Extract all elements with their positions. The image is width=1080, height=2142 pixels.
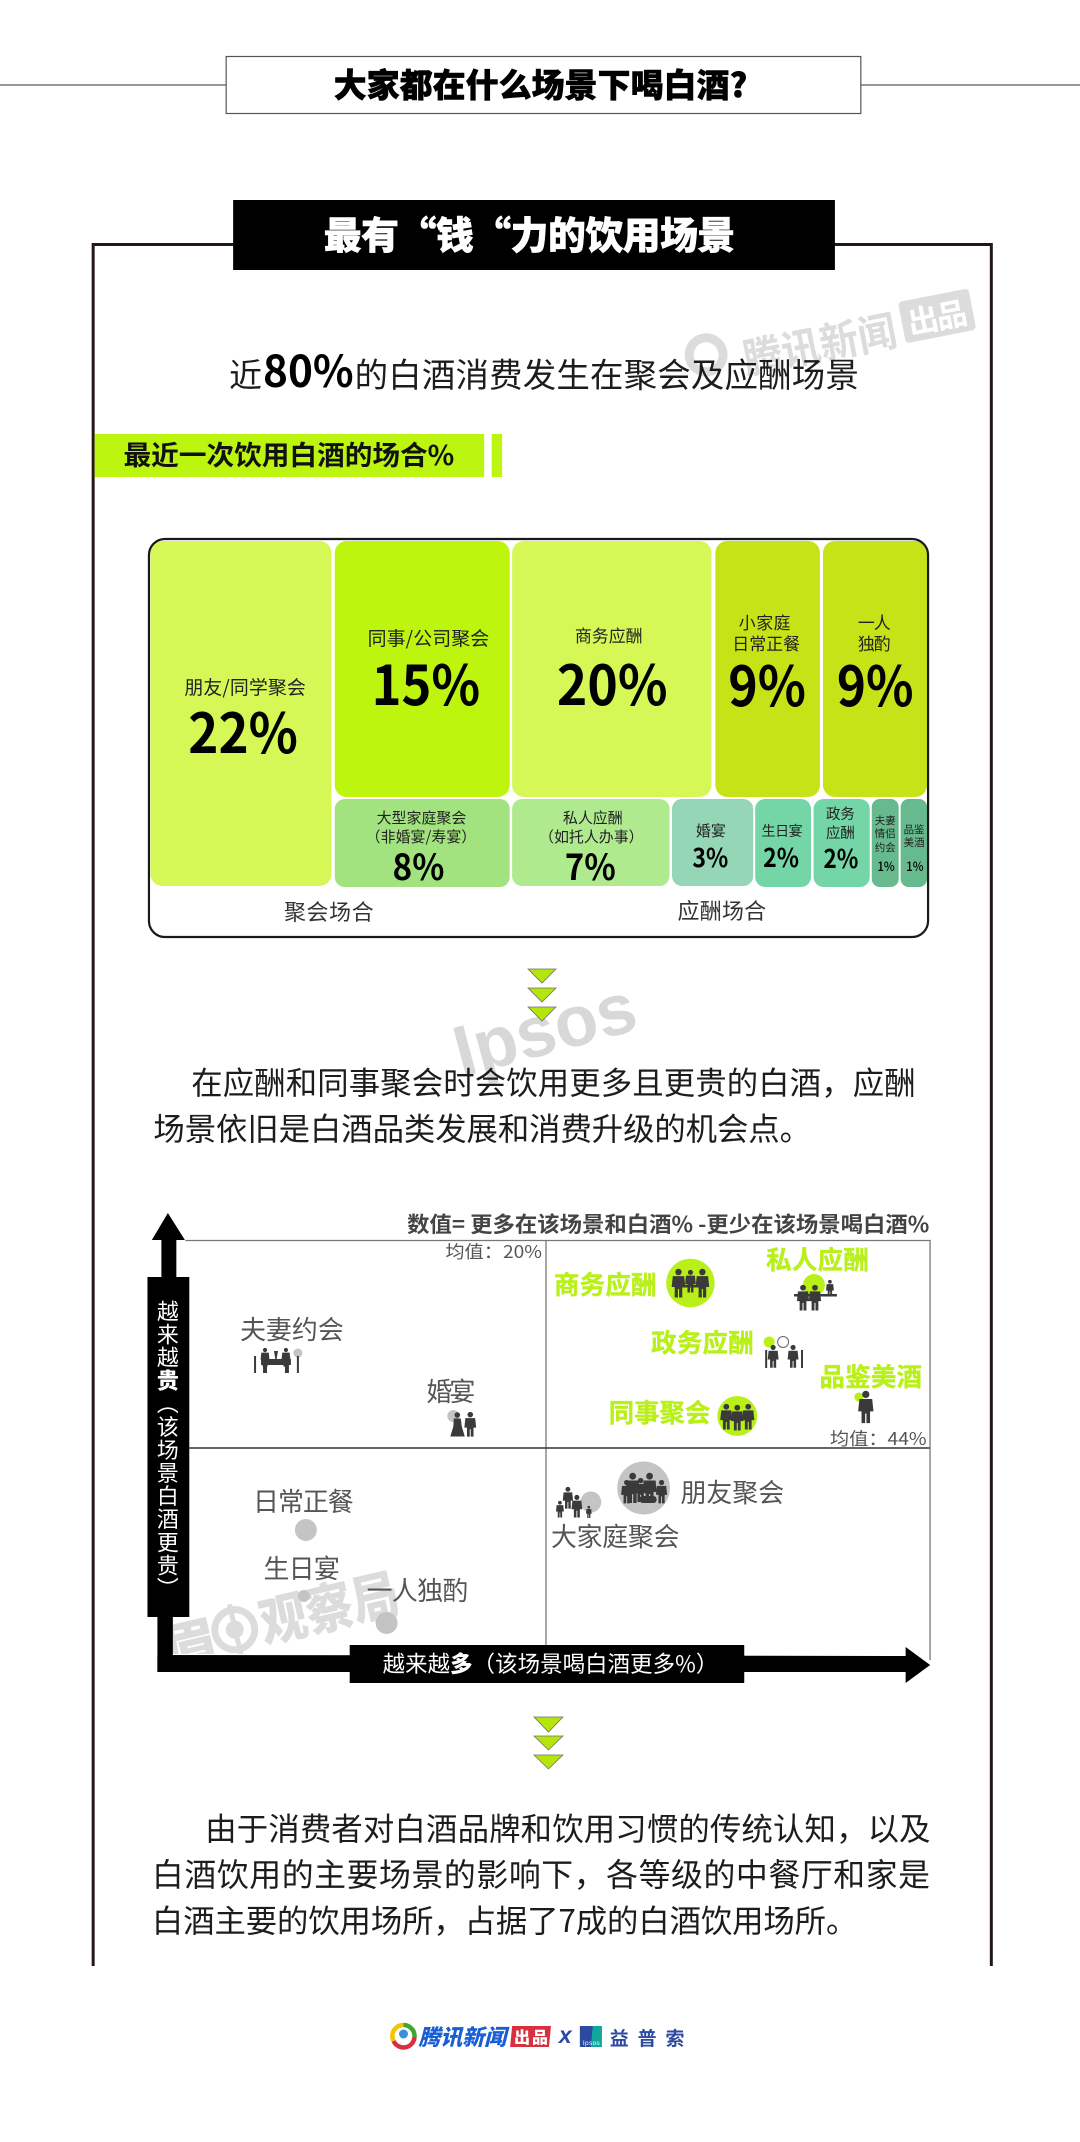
cell: business	[512, 541, 711, 797]
cell: government	[814, 799, 870, 887]
paragraph: drinking venues: 白酒主要的饮用场所，占据了7成的白酒饮用场所。	[152, 1897, 857, 1942]
watermark: Tencent News: 腾讯新闻	[737, 297, 902, 387]
bubble: government	[651, 1323, 803, 1368]
cell: tasting: 1%	[906, 856, 924, 875]
treemap chart	[149, 539, 928, 937]
watermark: observation bureau	[172, 1570, 398, 1654]
bubble: business	[554, 1259, 715, 1307]
quadrant chart: 均值：44%	[830, 1426, 927, 1451]
content frame	[93, 244, 991, 1966]
cell: government: 2%	[824, 839, 858, 876]
cell: private: 7%	[565, 839, 616, 891]
cell: friends: 朋友/同学聚会	[184, 673, 306, 700]
logo: Tencent News: 腾讯新闻	[418, 2021, 510, 2052]
bubble: drinking alone: 一人独酌	[367, 1571, 468, 1608]
cell: private: （如托人办事）	[539, 826, 644, 847]
cell: tasting: 美酒	[904, 835, 925, 850]
cell: wedding: 3%	[692, 838, 728, 875]
arrows: three down triangles	[534, 1717, 563, 1769]
bubble: colleagues	[609, 1393, 757, 1436]
headline	[229, 336, 859, 400]
cell: big family: （非婚宴/寿宴）	[366, 826, 476, 847]
bubble: colleagues: 同事聚会	[609, 1393, 710, 1430]
bubble: wedding	[426, 1372, 476, 1437]
watermark: Ipsos: Ipsos	[445, 967, 645, 1093]
y axis arrow: 越来越 贵 （该场景白酒更贵）	[152, 1300, 183, 1600]
bubble: daily meal: 日常正餐	[253, 1482, 354, 1519]
bubble: big family	[551, 1487, 679, 1554]
paragraph: premium scenes	[153, 1059, 916, 1150]
watermark: observation bureau: 观察局	[250, 1550, 406, 1659]
bubble: wedding: 婚宴	[426, 1372, 475, 1409]
paragraph: drinking venues: 白酒饮用的主要场景的影响下，各等级的中餐厅和家是	[152, 1850, 930, 1896]
cell: drinking alone	[823, 541, 927, 797]
cell: colleagues: 15%	[372, 641, 480, 721]
logo: Ipsos: Ipsos	[583, 2040, 600, 2047]
bubble: couple date: 夫妻约会	[240, 1310, 344, 1347]
bubble: birthday	[264, 1549, 340, 1602]
cell: tasting: 品鉴	[904, 822, 925, 837]
bubble: tasting: 品鉴美酒	[819, 1357, 922, 1394]
x axis arrow	[157, 1645, 930, 1683]
brand name: 益 普 索	[610, 2024, 685, 2051]
logo: Ipsos	[580, 2026, 602, 2047]
watermark: Tencent News: 出品	[903, 287, 971, 343]
cell: business: 20%	[557, 641, 668, 721]
bubble: friends gathering: 朋友聚会	[680, 1473, 784, 1510]
cell: couples: 1%	[877, 856, 895, 875]
bubble: private: 私人应酬	[766, 1240, 869, 1277]
cell: drinking alone: 独酌	[858, 630, 891, 655]
cell: small family meal	[715, 541, 820, 797]
treemap outline and group labels: 聚会场合	[284, 896, 374, 927]
cell: government: 政务	[826, 803, 855, 824]
bubble: couple date	[240, 1310, 344, 1373]
cell: couples: 情侣	[875, 826, 896, 841]
cell: business: 商务应酬	[575, 622, 643, 647]
cell: colleagues: 同事/公司聚会	[368, 624, 489, 651]
paragraph: drinking venues: 由于消费者对白酒品牌和饮用习惯的传统认知，以及	[205, 1805, 931, 1850]
treemap outline and group labels: 应酬场合	[677, 895, 766, 926]
cell: birthday: 生日宴	[762, 821, 803, 841]
cell: friends	[150, 541, 331, 886]
cell: small family meal: 日常正餐	[732, 630, 800, 655]
chart subtitle tag: 最近一次饮用白酒的场合%	[124, 434, 454, 473]
cell: private: 私人应酬	[563, 807, 623, 828]
plot grid	[185, 1240, 930, 1660]
cell: big family: 8%	[393, 839, 444, 891]
bubble: daily meal	[253, 1482, 354, 1541]
bubble: birthday: 生日宴	[264, 1549, 340, 1586]
cell: couples	[872, 799, 899, 887]
x axis arrow: 越来越多（该场景喝白酒更多%）	[383, 1647, 718, 1679]
headline: 80%	[263, 336, 354, 400]
arrows: three down triangles	[528, 969, 556, 1021]
cell: small family meal: 小家庭	[739, 609, 791, 634]
treemap outline and group labels	[149, 539, 928, 937]
cell: tasting	[901, 799, 927, 887]
cell: wedding	[672, 799, 753, 886]
cell: friends: 22%	[188, 689, 298, 769]
cell: drinking alone: 9%	[837, 642, 914, 722]
title bar: 大家都在什么场景下喝白酒?	[334, 60, 747, 107]
cell: big family	[335, 799, 510, 891]
cell: couples: 约会	[875, 840, 896, 855]
watermark: Tencent News	[686, 282, 979, 397]
bubble: private	[766, 1240, 869, 1310]
cell: wedding: 婚宴	[696, 820, 726, 841]
cell: big family: 大型家庭聚会	[377, 807, 466, 828]
paragraph: premium scenes: 场景依旧是白酒品类发展和消费升级的机会点。	[153, 1105, 811, 1150]
headline: 近	[229, 350, 262, 397]
watermark: observation bureau: 眉	[154, 1597, 225, 1686]
section banner: 最有“钱“力的饮用场景	[324, 205, 735, 260]
mean labels: 均值：20%	[445, 1239, 542, 1264]
bubble: government: 政务应酬	[651, 1323, 754, 1360]
cell: colleagues	[335, 541, 510, 797]
chart note: 数值= 更多在该场景和白酒% -更少在该场景喝白酒%	[407, 1208, 929, 1239]
bubble: drinking alone	[367, 1571, 468, 1634]
cell: birthday: 2%	[763, 838, 799, 875]
y axis arrow	[147, 1213, 189, 1672]
title bar	[0, 56, 1080, 114]
footer logos	[392, 2021, 685, 2052]
paragraph: drinking venues	[152, 1805, 931, 1942]
logo: product tag: 出品	[514, 2024, 548, 2048]
bubble: business: 商务应酬	[554, 1265, 657, 1302]
paragraph: premium scenes: 在应酬和同事聚会时会饮用更多且更贵的白酒，应酬	[191, 1059, 916, 1104]
headline: 的白酒消费发生在聚会及应酬场景	[355, 348, 859, 397]
times sign: x	[557, 2022, 573, 2048]
cell: government: 应酬	[826, 822, 855, 843]
bubble: tasting	[819, 1357, 922, 1423]
cell: birthday	[755, 799, 811, 887]
bubble: big family: 大家庭聚会	[551, 1517, 679, 1554]
bubble: friends gathering	[617, 1462, 784, 1514]
cell: couples: 夫妻	[875, 813, 896, 828]
cell: drinking alone: 一人	[858, 609, 891, 634]
quadrant chart	[147, 1208, 930, 1686]
section banner	[233, 200, 835, 270]
cell: private	[512, 799, 670, 891]
cell: small family meal: 9%	[728, 642, 806, 722]
